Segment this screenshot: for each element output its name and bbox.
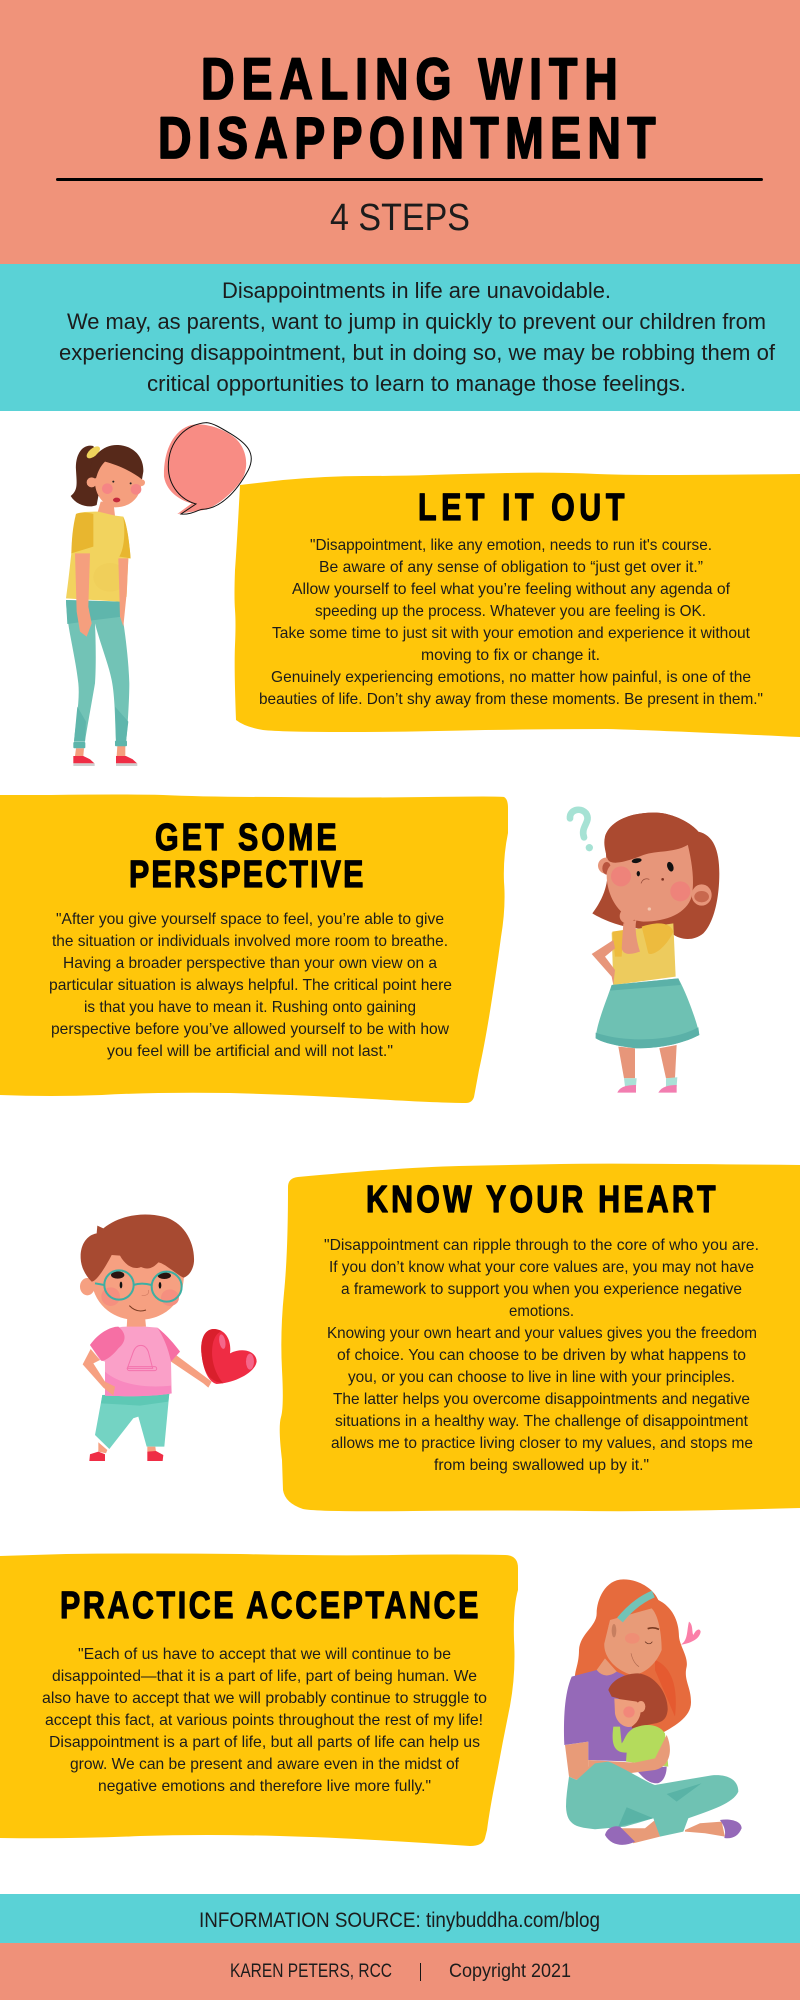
body text: Having a broader perspective than your own view on a	[63, 955, 437, 972]
body text: Be aware of any sense of obligation to “just get over it.”	[319, 559, 703, 576]
panel: let it out	[234, 473, 800, 737]
body text: If you don’t know what your core values are, you may not have	[329, 1259, 754, 1276]
body text: Disappointment is a part of life, but all parts of life can help us	[49, 1734, 480, 1751]
body text: moving to fix or change it.	[421, 647, 600, 664]
body text: "Each of us have to accept that we will continue to be	[78, 1646, 451, 1663]
intro text	[59, 278, 776, 396]
body text: perspective before you’ve allowed yourself to be with how	[51, 1021, 449, 1038]
body text: grow. We can be present and aware even in the midst of	[70, 1756, 460, 1773]
body text: Allow yourself to feel what you’re feeling without any agenda of	[292, 581, 731, 598]
icon: question mark	[570, 810, 593, 851]
body text: emotions.	[509, 1303, 574, 1320]
illustration: boy holding heart	[80, 1214, 257, 1461]
illustration: speech bubble	[164, 423, 251, 514]
footer band	[0, 1943, 800, 2000]
body text: situations in a healthy way. The challenge of disappointment	[335, 1413, 749, 1430]
source band	[0, 1894, 800, 1943]
body text: allows me to practice living closer to my values, and stops me	[331, 1435, 753, 1452]
body text: from being swallowed up by it."	[434, 1457, 649, 1474]
body text: negative emotions and therefore live more fully."	[98, 1778, 431, 1795]
body text: you feel will be artificial and will not last."	[107, 1043, 393, 1060]
icon: glasses	[95, 1270, 182, 1302]
intro text: experiencing disappointment, but in doing so, we may be robbing them of	[59, 340, 776, 365]
body text: you, or you can choose to live in line with your principles.	[348, 1369, 735, 1386]
icon: heart	[201, 1329, 257, 1384]
body text	[49, 911, 452, 1060]
source text: INFORMATION SOURCE: tinybuddha.com/blog	[199, 1909, 600, 1932]
body text: beauties of life. Don’t shy away from these moments. Be present in them."	[259, 691, 763, 708]
body text: particular situation is always helpful. The critical point here	[49, 977, 452, 994]
heading: GET SOME	[155, 817, 337, 859]
illustration: mother hugging child	[564, 1579, 742, 1845]
heading: PRACTICE ACCEPTANCE	[60, 1585, 478, 1627]
body text: Genuinely experiencing emotions, no matter how painful, is one of the	[271, 669, 751, 686]
illustration: thinking girl	[570, 810, 719, 1093]
panel: get some perspective	[0, 794, 508, 1103]
intro text: Disappointments in life are unavoidable.	[222, 278, 611, 303]
heading: PERSPECTIVE	[129, 854, 363, 896]
body text: the situation or individuals involved more room to breathe.	[52, 933, 448, 950]
body text: accept this fact, at various points throughout the rest of my life!	[45, 1712, 483, 1729]
heading: KNOW YOUR HEART	[366, 1179, 716, 1221]
body text: is that you have to mean it. Rushing onto gaining	[84, 999, 416, 1016]
body text: "Disappointment, like any emotion, needs to run it's course.	[310, 537, 712, 554]
header band	[0, 0, 800, 264]
author: KAREN PETERS, RCC	[230, 1961, 392, 1982]
title	[158, 47, 656, 171]
body text: Knowing your own heart and your values gives you the freedom	[327, 1325, 757, 1342]
copyright: Copyright 2021	[449, 1961, 571, 1982]
body text	[42, 1646, 487, 1795]
title: DISAPPOINTMENT	[158, 106, 656, 171]
body text	[259, 537, 763, 708]
body text: Take some time to just sit with your emotion and experience it without	[272, 625, 751, 642]
subtitle: 4 STEPS	[330, 197, 470, 239]
body text: speeding up the process. Whatever you are feeling is OK.	[315, 603, 706, 620]
title: DEALING WITH	[201, 47, 618, 112]
panel: practice acceptance	[0, 1554, 518, 1846]
icon: small heart	[681, 1622, 701, 1645]
intro band	[0, 264, 800, 411]
intro text: We may, as parents, want to jump in quickly to prevent our children from	[67, 309, 766, 334]
intro text: critical opportunities to learn to manage those feelings.	[147, 371, 686, 396]
body text: "Disappointment can ripple through to the core of who you are.	[324, 1237, 759, 1254]
heading	[129, 817, 363, 896]
body text: also have to accept that we will probably continue to struggle to	[42, 1690, 487, 1707]
body text: disappointed—that it is a part of life, part of being human. We	[52, 1668, 477, 1685]
body text: of choice. You can choose to be driven by what happens to	[337, 1347, 746, 1364]
body text	[324, 1237, 759, 1474]
panel: know your heart	[280, 1164, 800, 1511]
body text: a framework to support you when you experience negative	[341, 1281, 742, 1298]
body text: "After you give yourself space to feel, you’re able to give	[56, 911, 444, 928]
body text: The latter helps you overcome disappointments and negative	[333, 1391, 750, 1408]
illustration: standing woman	[66, 444, 145, 766]
heading: LET IT OUT	[418, 487, 624, 529]
